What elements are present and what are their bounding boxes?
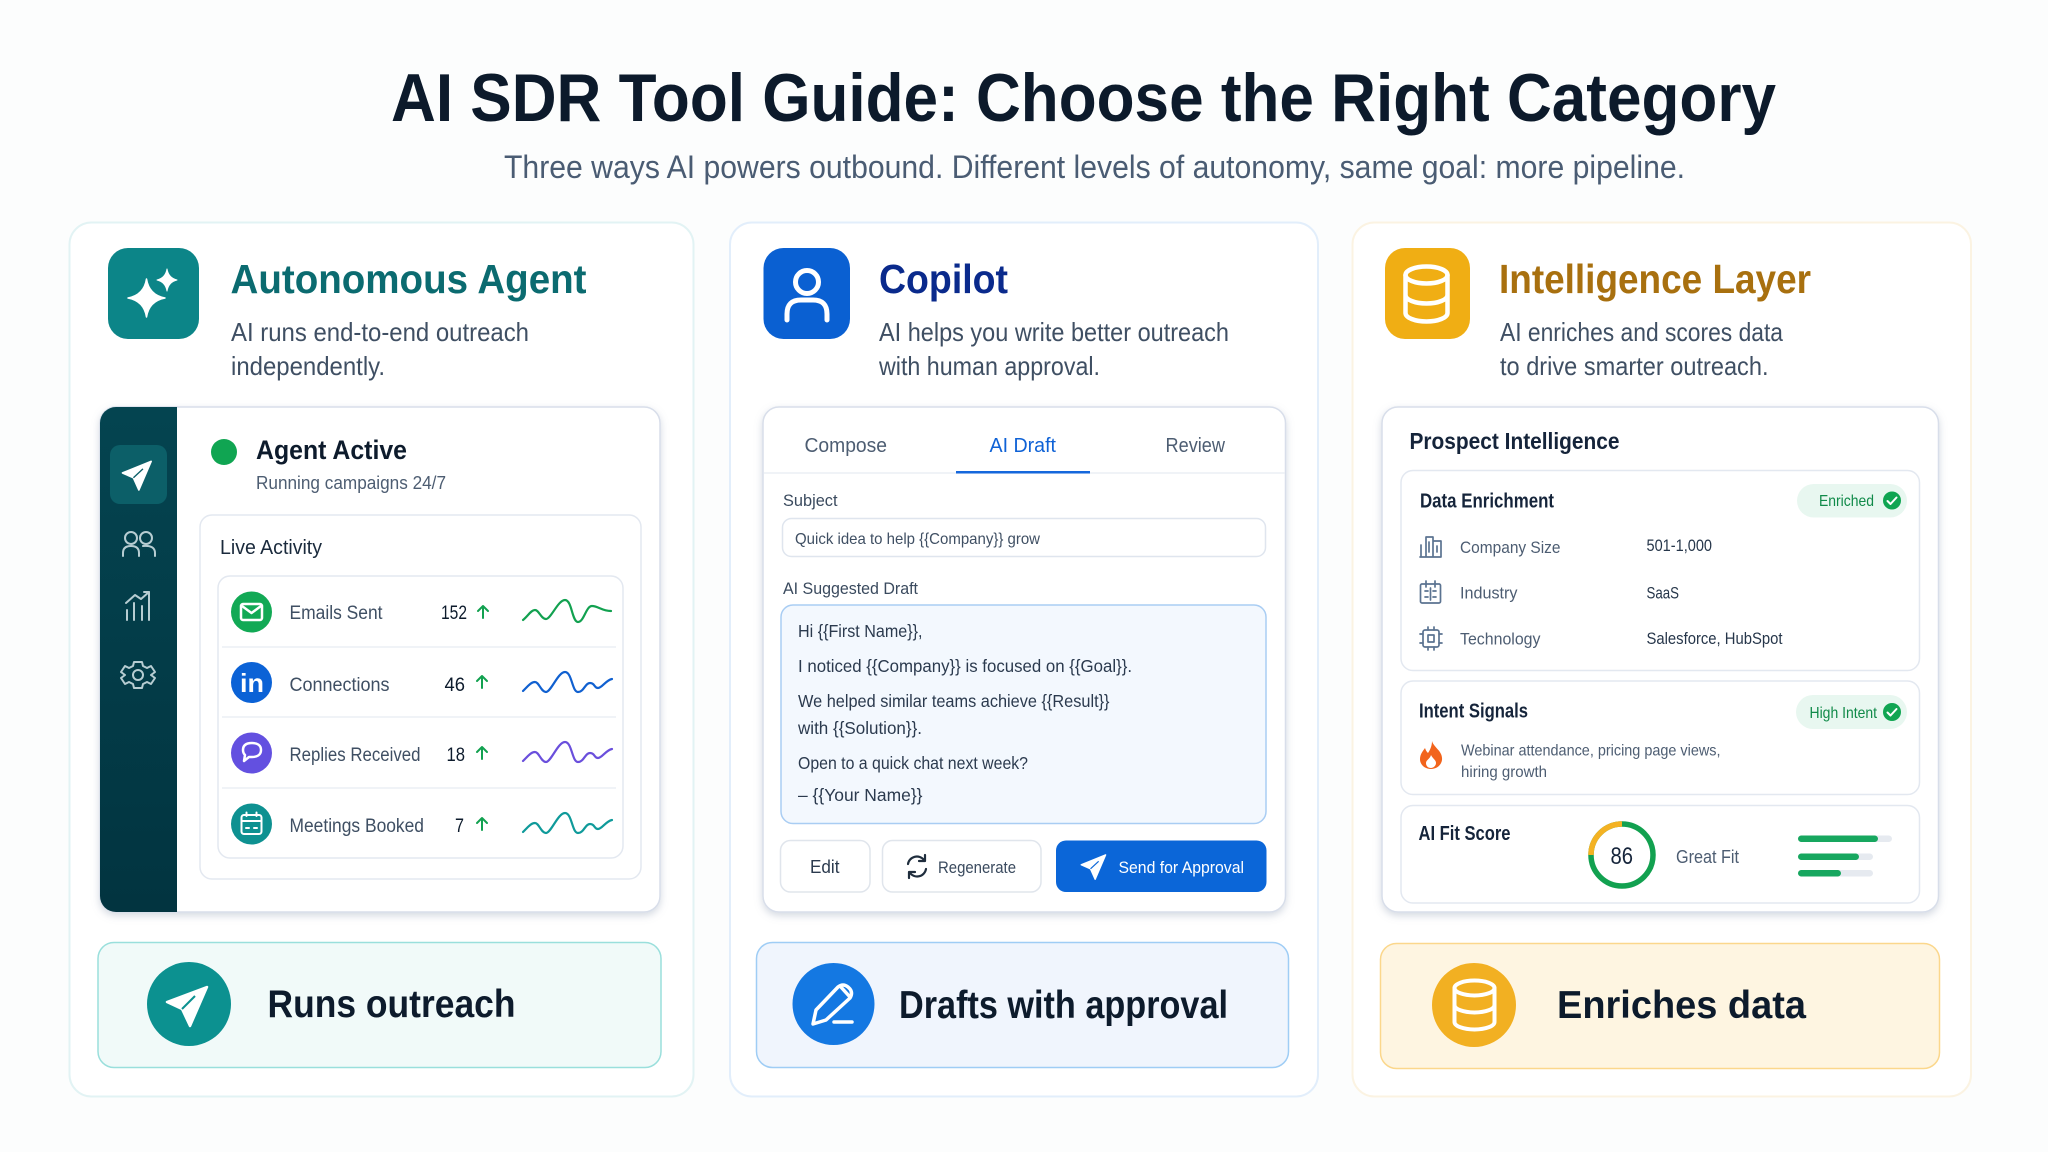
score ring	[1591, 824, 1653, 886]
row: meetings booked	[231, 804, 612, 844]
callout: runs outreach: Runs outreach	[268, 983, 516, 1026]
row: connections: Connections	[290, 675, 390, 696]
button: send for approval: Send for Approval	[1118, 858, 1244, 877]
icon: database	[1385, 248, 1470, 339]
icon: company size	[1420, 537, 1441, 557]
title: AI SDR Tool Guide: Choose the Right Category	[391, 60, 1776, 136]
row: emails sent: Emails Sent	[290, 603, 383, 624]
subtitle: Three ways AI powers outbound. Different levels of autonomy, same goal: more pipeline.	[504, 149, 1685, 185]
icon: chart	[126, 592, 149, 620]
AI suggested draft: We helped similar teams achieve {{Result}}	[798, 691, 1110, 711]
email composer mock	[763, 407, 1286, 912]
icon: send active	[110, 445, 167, 504]
button: edit	[780, 840, 870, 892]
AI suggested draft: Open to a quick chat next week?	[798, 753, 1028, 773]
row: replies received: Replies Received	[290, 745, 420, 766]
badge: enriched	[1797, 484, 1907, 518]
heading: prospect intelligence: Prospect Intelligence	[1410, 428, 1620, 454]
panel: copilot	[730, 222, 1318, 1096]
card: data enrichment: Company Size	[1460, 538, 1560, 557]
prospect intelligence mock	[1382, 407, 1938, 912]
icon: person	[764, 248, 850, 339]
callout: enriches data: Enriches data	[1557, 984, 1806, 1027]
heading: live activity: Live Activity	[220, 537, 322, 559]
icon: flame	[1420, 741, 1442, 769]
card: data enrichment: 501-1,000	[1646, 536, 1712, 555]
icon: sparkles	[108, 248, 199, 339]
subject field: Subject	[783, 491, 838, 510]
row: replies received	[231, 732, 612, 774]
tabs: Compose	[804, 435, 887, 457]
row: connections	[231, 662, 612, 703]
card: data enrichment: SaaS	[1646, 584, 1679, 602]
subject field	[782, 491, 1266, 556]
card: data enrichment: Data Enrichment	[1420, 490, 1554, 512]
tabs: AI Draft	[990, 435, 1056, 457]
icon: industry	[1420, 581, 1440, 603]
card: AI fit score: Great Fit	[1676, 847, 1739, 867]
panel: autonomous agent	[70, 222, 694, 1096]
card: data enrichment: Industry	[1460, 584, 1518, 602]
AI suggested draft: with {{Solution}}.	[797, 718, 922, 738]
dashboard mock: agent	[100, 407, 660, 912]
subject field: Quick idea to help {{Company}} grow	[795, 531, 1040, 548]
description	[1500, 317, 1783, 381]
sidebar	[100, 407, 177, 912]
tabs	[764, 435, 1285, 474]
score bars	[1798, 836, 1892, 876]
callout: drafts with approval: Drafts with approval	[899, 984, 1228, 1027]
status heading: Agent Active	[256, 435, 407, 465]
AI suggested draft: AI Suggested Draft	[783, 579, 918, 598]
badge: enriched: Enriched	[1819, 493, 1874, 510]
status subtitle: Running campaigns 24/7	[256, 473, 446, 493]
description: independently.	[231, 351, 385, 381]
row: emails sent: 152	[441, 603, 467, 624]
AI suggested draft: – {{Your Name}}	[798, 785, 923, 805]
button: regenerate: Regenerate	[938, 858, 1016, 877]
card: intent signals	[1401, 681, 1920, 794]
description	[878, 317, 1229, 381]
row: meetings booked: Meetings Booked	[290, 816, 424, 837]
AI suggested draft	[781, 579, 1266, 824]
description: AI helps you write better outreach	[879, 317, 1229, 347]
row: meetings booked: 7	[455, 816, 464, 837]
button: send for approval	[1056, 840, 1266, 892]
badge: high intent: High Intent	[1810, 705, 1877, 722]
description: to drive smarter outreach.	[1500, 351, 1768, 381]
tabs: Review	[1166, 435, 1226, 457]
live activity card	[200, 515, 641, 879]
heading: Autonomous Agent: Autonomous Agent	[230, 256, 587, 302]
card: data enrichment: Salesforce, HubSpot	[1646, 629, 1783, 648]
icon: gear	[121, 662, 155, 688]
description	[231, 317, 529, 381]
button: edit: Edit	[810, 857, 840, 877]
row: emails sent	[231, 592, 611, 632]
row: connections: in	[240, 668, 264, 698]
heading: Copilot: Copilot	[879, 256, 1008, 302]
callout: runs outreach	[98, 942, 661, 1068]
description: AI enriches and scores data	[1500, 317, 1783, 347]
panel: intelligence layer	[1352, 222, 1971, 1096]
status dot	[211, 439, 237, 465]
score ring: 86	[1610, 843, 1633, 870]
card: AI fit score: AI Fit Score	[1418, 823, 1510, 845]
description: with human approval.	[878, 351, 1100, 381]
card: intent signals: Intent Signals	[1419, 700, 1528, 722]
card: intent signals: Webinar attendance, pricing page views,	[1461, 742, 1720, 760]
badge: high intent	[1796, 695, 1907, 729]
AI suggested draft: Hi {{First Name}},	[798, 621, 922, 641]
card: data enrichment: Technology	[1460, 630, 1541, 648]
card: AI fit score	[1401, 806, 1920, 903]
callout: enriches data	[1380, 944, 1940, 1068]
AI suggested draft: I noticed {{Company}} is focused on {{Goal}}.	[798, 656, 1132, 676]
description: AI runs end-to-end outreach	[231, 317, 529, 347]
row: replies received: 18	[446, 745, 465, 766]
heading: Intelligence Layer: Intelligence Layer	[1499, 256, 1811, 302]
button: regenerate	[882, 840, 1041, 892]
icon: people	[123, 532, 155, 556]
icon: technology	[1420, 627, 1442, 650]
row: connections: 46	[444, 675, 465, 696]
callout: drafts with approval	[756, 942, 1288, 1068]
card: data enrichment	[1401, 470, 1920, 670]
card: intent signals: hiring growth	[1461, 764, 1547, 781]
